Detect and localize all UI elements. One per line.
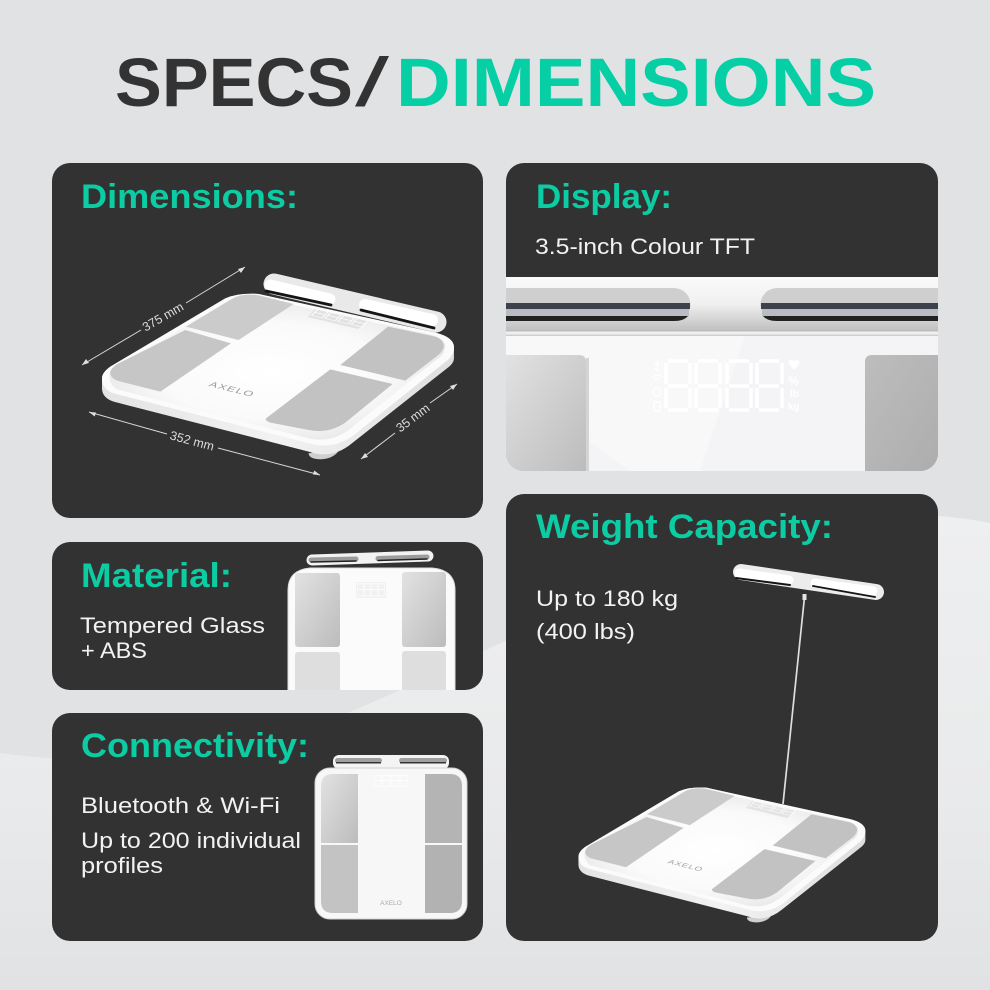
dimension arrow: 352 mm [89,412,320,475]
right pad [865,355,938,471]
text: connectivity: profiles [81,853,163,878]
display icons: kg [788,402,800,413]
segment display [721,360,784,412]
pads [321,774,462,913]
cable [783,597,804,804]
scale: top view [315,755,467,919]
panel: dimensions [52,163,483,518]
scale handle: standing [736,572,876,600]
display [356,582,386,598]
dimension arrow: 352 mm: 352 mm [168,428,216,454]
scale: isometric body [578,787,865,922]
handle [506,277,938,336]
handle [311,556,428,562]
pad shadow [586,358,589,471]
display icons: % [788,374,799,388]
title: SPECS [115,44,353,121]
text: weight capacity: Up to 180 kg [536,586,678,611]
display [375,776,407,786]
panel: display [506,163,938,471]
heading: display: Display: [536,178,672,216]
scale logo: AXELO [666,859,705,873]
body [288,568,455,700]
dimension arrow: 35 mm [361,384,457,459]
text: material: + ABS [81,638,147,663]
handle [333,755,449,769]
scale handle: isometric [266,284,436,328]
heading: material: Material: [81,557,232,595]
panel: material [52,542,483,700]
heading: connectivity: Connectivity: [81,727,309,765]
title: DIMENSIONS [396,44,876,121]
text: connectivity [81,793,301,878]
text: weight capacity: (400 lbs) [536,619,635,644]
text: display: 3.5-inch Colour TFT [535,234,755,259]
display icons: lb [790,389,799,400]
panel: connectivity [52,713,483,941]
scale logo: AXELO [206,381,256,399]
scale: isometric body [102,294,454,459]
heading: weight capacity: Weight Capacity: [536,508,833,546]
panel: weight capacity [506,494,938,941]
dimension arrow: 35 mm: 35 mm [394,401,432,435]
glass [506,336,938,471]
text: material [80,613,265,663]
text: connectivity: Up to 200 individual [81,828,301,853]
text: weight capacity [536,586,678,644]
dimension arrow: 375 mm [82,267,245,365]
scale: top view cropped [288,556,455,700]
scale close-up [506,277,938,471]
title [115,44,876,121]
text: material: Tempered Glass [80,613,265,638]
title: / [355,44,390,121]
body [315,768,467,919]
logo: AXELO [380,900,402,907]
left pad [506,355,586,471]
text: connectivity: Bluetooth & Wi-Fi [81,793,280,818]
display icons [788,360,799,412]
pads [295,572,446,692]
heading: dimensions: Dimensions: [81,178,298,216]
scale display [746,801,796,818]
scale display [308,309,369,329]
dimension arrow: 375 mm: 375 mm [140,300,186,334]
